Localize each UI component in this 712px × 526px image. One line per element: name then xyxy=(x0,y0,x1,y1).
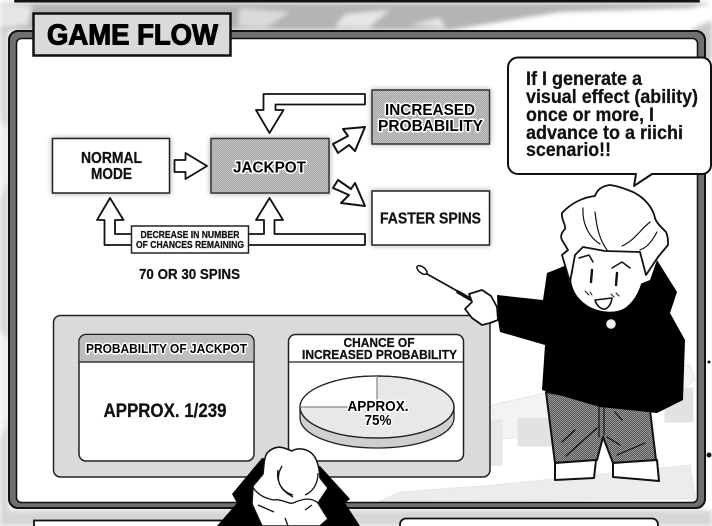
flow chart xyxy=(52,90,490,283)
box: increased probability xyxy=(372,90,490,144)
box: jackpot: JACKPOT xyxy=(233,160,306,176)
box: faster spins: FASTER SPINS xyxy=(380,210,481,228)
hair lines xyxy=(252,466,318,526)
speech bubble: once or more, I xyxy=(526,105,654,126)
box: increased probability: INCREASED xyxy=(385,102,475,119)
heading: game flow: GAME FLOW xyxy=(47,20,218,52)
face details xyxy=(579,255,630,309)
panel: probabilities xyxy=(54,316,490,477)
trouser creases xyxy=(562,407,645,456)
face xyxy=(571,247,643,312)
box: normal mode xyxy=(52,138,170,193)
box: faster spins xyxy=(372,191,490,245)
panel edge: right xyxy=(400,518,658,526)
character: teacher with pointer xyxy=(415,185,685,481)
card: chance of increased probability xyxy=(288,334,464,461)
character: second figure at bottom xyxy=(217,447,360,526)
arrow: increased probability back to jackpot xyxy=(256,94,365,133)
trousers xyxy=(546,392,656,463)
card: chance of increased probability: INCREASED PROBABILITY xyxy=(302,348,458,362)
label: decrease in number of chances remaining xyxy=(132,226,248,253)
box: normal mode: NORMAL xyxy=(81,150,142,167)
cuffs xyxy=(555,460,659,481)
speech bubble: scenario!! xyxy=(526,140,611,161)
speech bubble xyxy=(508,58,711,186)
speech bubble: advance to a riichi xyxy=(526,123,683,144)
lower panels at page bottom xyxy=(34,518,658,526)
box: jackpot xyxy=(211,138,329,193)
arrow: jackpot to increased probability xyxy=(333,127,365,153)
pie chart: approx 75%: APPROX. xyxy=(348,398,408,415)
card: probability of jackpot: APPROX. 1/239 xyxy=(104,400,227,422)
hand xyxy=(465,290,498,325)
box: normal mode: MODE xyxy=(91,166,132,183)
pie chart: approx 75% xyxy=(300,376,454,448)
label: decrease in number of chances remaining: DECREASE IN NUMBER xyxy=(140,230,240,241)
hair xyxy=(561,185,668,282)
label: 70 or 30 spins: 70 OR 30 SPINS xyxy=(139,266,240,283)
arrow: faster spins return to jackpot xyxy=(245,198,365,245)
speech bubble: visual effect (ability) xyxy=(526,87,698,108)
card: chance of increased probability: CHANCE OF xyxy=(344,336,415,350)
arrow: jackpot to faster spins xyxy=(333,180,365,206)
box: increased probability: PROBABILITY xyxy=(378,118,483,135)
panel edge: left xyxy=(34,520,231,526)
heading: game flow xyxy=(34,14,230,56)
jacket xyxy=(217,458,360,526)
speech bubble: If I generate a xyxy=(526,69,642,90)
arrow: chances remaining to normal mode xyxy=(97,198,135,245)
arrow: normal mode to jackpot xyxy=(174,153,207,179)
building backdrop xyxy=(380,365,696,501)
jacket xyxy=(497,260,685,413)
pie chart: approx 75%: 75% xyxy=(364,412,392,429)
hair and face xyxy=(252,447,328,526)
card: probability of jackpot: PROBABILITY OF JACKPOT xyxy=(86,341,247,356)
card: probability of jackpot xyxy=(79,334,254,461)
jacket button xyxy=(606,319,616,329)
label: decrease in number of chances remaining: OF CHANCES REMAINING xyxy=(136,240,244,251)
pointer xyxy=(415,264,470,299)
